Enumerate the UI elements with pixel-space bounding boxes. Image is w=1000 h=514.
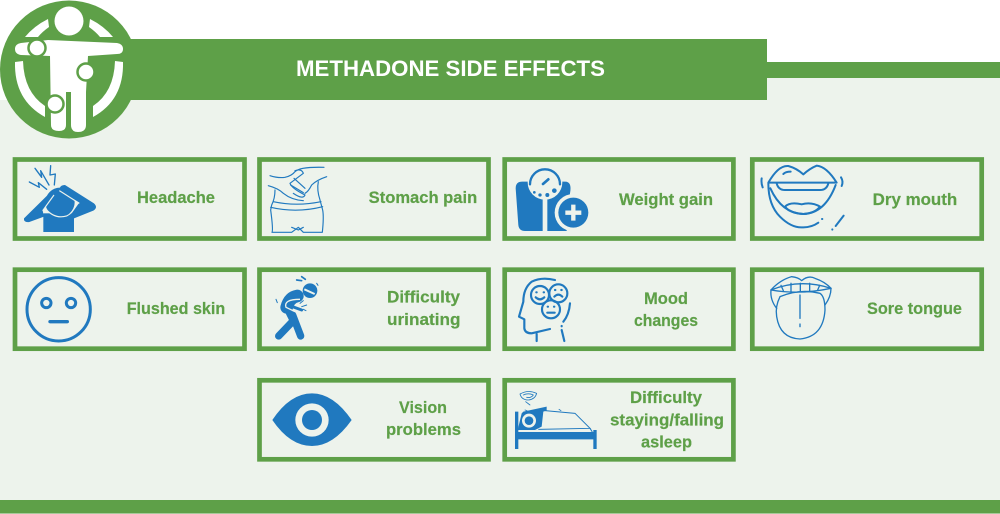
icon: tongue	[771, 277, 831, 339]
label: vision problems: Vision	[399, 399, 447, 417]
label: sore tongue: Sore tongue	[867, 300, 962, 318]
label: difficulty staying/falling asleep	[610, 389, 724, 452]
icon: head with emotions	[519, 279, 570, 341]
panel: flushed skin	[15, 270, 244, 349]
label: difficulty staying/falling asleep: Difficulty	[630, 389, 703, 407]
icon: human body with pain points	[0, 0, 138, 138]
panel: headache	[15, 160, 244, 238]
icon: scale with plus	[516, 165, 592, 232]
label: difficulty staying/falling asleep: staying/falling	[610, 412, 724, 430]
footer bar	[0, 500, 1000, 514]
icon: person awake in bed	[515, 391, 597, 449]
icon: headache	[24, 166, 96, 232]
panel: mood changes	[505, 270, 733, 349]
label: difficulty urinating	[387, 289, 461, 329]
title: METHADONE SIDE EFFECTS	[296, 56, 605, 81]
label: dry mouth: Dry mouth	[873, 191, 957, 209]
label: vision problems: problems	[386, 421, 461, 439]
icon: mouth	[761, 166, 844, 230]
panel: sore tongue	[752, 270, 982, 349]
panel: stomach pain	[260, 160, 488, 238]
label: difficulty urinating: urinating	[387, 311, 460, 329]
panel: difficulty urinating	[260, 270, 488, 349]
label: mood changes	[634, 290, 698, 330]
panel: dry mouth	[752, 160, 982, 238]
icon: neutral face	[27, 278, 90, 341]
label: headache: Headache	[137, 189, 215, 207]
icon: eye	[272, 393, 352, 446]
label: mood changes: changes	[634, 312, 698, 330]
label: flushed skin: Flushed skin	[127, 300, 225, 318]
icon: bent-over figure	[276, 277, 318, 336]
panel: weight gain	[505, 160, 733, 238]
panel: vision problems	[260, 380, 488, 459]
header banner	[120, 39, 1000, 100]
label: stomach pain: Stomach pain	[369, 189, 477, 207]
panel: difficulty sleeping	[505, 380, 733, 459]
label: weight gain: Weight gain	[619, 191, 713, 209]
label: vision problems	[386, 399, 461, 439]
label: mood changes: Mood	[644, 290, 688, 308]
icon: stomach	[268, 167, 327, 232]
label: difficulty staying/falling asleep: asleep	[641, 434, 692, 452]
label: difficulty urinating: Difficulty	[387, 289, 461, 307]
